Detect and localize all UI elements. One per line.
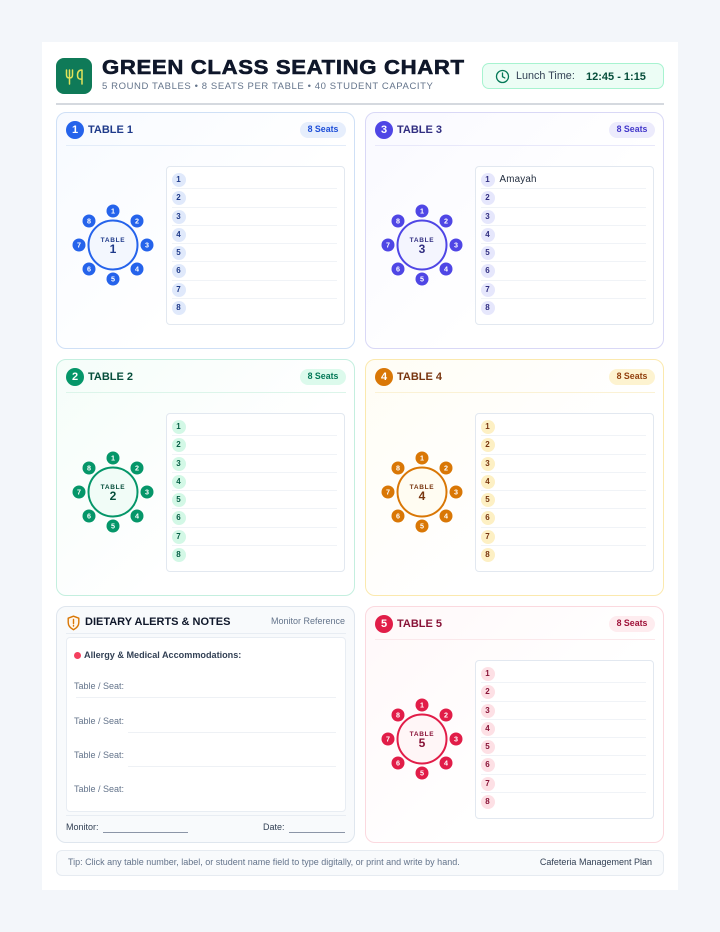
table 2 student list: 2 xyxy=(176,440,181,449)
table 4 heading: TABLE 4 xyxy=(397,371,442,383)
panel: table 5 xyxy=(365,606,664,843)
red alert dot xyxy=(74,652,81,659)
table 2 round diagram: 2 xyxy=(109,489,116,503)
table 3 round diagram: 3 xyxy=(418,242,425,256)
table 1 seat count xyxy=(300,122,346,138)
allergy heading xyxy=(74,650,241,660)
table 1 number badge: 1 xyxy=(72,124,78,136)
table 5 student list xyxy=(474,660,654,819)
table 4 seat count xyxy=(609,369,655,385)
table 1 round diagram: 1 xyxy=(109,242,116,256)
table 1 student list: 1 xyxy=(176,175,181,184)
table 5 student list: 4 xyxy=(485,724,490,733)
table 3 round diagram xyxy=(382,204,462,286)
table 5 round diagram: 1 xyxy=(420,700,424,710)
table 4 round diagram: 3 xyxy=(454,488,458,496)
table 5 heading: TABLE 5 xyxy=(397,618,442,630)
panel: table 4 xyxy=(365,359,664,596)
table 4 round diagram: 5 xyxy=(420,522,424,530)
icon: warning shield xyxy=(68,616,80,630)
table 1 round diagram: TABLE xyxy=(100,237,125,244)
table 5 student list: 3 xyxy=(485,706,490,715)
subtitle: 5 ROUND TABLES • 8 SEATS PER TABLE • 40 STUDENT CAPACITY xyxy=(102,81,434,92)
table 3 student list: 5 xyxy=(485,248,490,257)
table 2 student list: 3 xyxy=(176,459,181,468)
table 2 number badge: 2 xyxy=(72,371,78,383)
table 1 round diagram: 6 xyxy=(87,264,91,274)
table 1 student list: 4 xyxy=(176,230,181,239)
table 5 student list: 8 xyxy=(485,797,490,806)
table 5 round diagram: TABLE xyxy=(409,731,434,738)
table 2 round diagram: 4 xyxy=(135,512,139,520)
table seat field 3: Table / Seat: xyxy=(74,750,124,760)
table 2 seat count xyxy=(300,369,346,385)
table 2 round diagram: 8 xyxy=(87,464,91,472)
icon: clock xyxy=(496,70,510,84)
table 5 seat count: 8 Seats xyxy=(617,618,647,628)
table 3 number badge xyxy=(375,121,393,139)
table 4 round diagram: 4 xyxy=(444,512,448,520)
table 1 student list: 8 xyxy=(176,303,181,312)
panel: table 2 xyxy=(56,359,355,596)
table 2 round diagram: 2 xyxy=(135,464,139,472)
lunch time badge xyxy=(482,63,664,89)
table 3 student list: 1 xyxy=(485,175,490,184)
table 1 round diagram: 3 xyxy=(145,240,149,250)
table 1 round diagram: 8 xyxy=(87,216,91,226)
table 3 student list: 8 xyxy=(485,303,490,312)
footer tip: Tip: Click any table number, label, or student name field to type digitally, or print and write by hand. xyxy=(68,857,460,867)
table 3 round diagram: 3 xyxy=(454,240,458,250)
table 1 number badge xyxy=(66,121,84,139)
table seat field 2: Table / Seat: xyxy=(74,716,124,726)
table 4 round diagram: 8 xyxy=(396,464,400,472)
dietary heading: DIETARY ALERTS & NOTES xyxy=(85,616,230,628)
table 3 round diagram: 5 xyxy=(420,274,424,284)
table 2 round diagram xyxy=(72,452,154,532)
table 5 round diagram: 4 xyxy=(444,758,448,768)
table 1 student list: 7 xyxy=(176,285,181,294)
table 1 heading: TABLE 1 xyxy=(88,124,133,136)
table 2 student list: 7 xyxy=(176,532,181,541)
table 3 student list xyxy=(474,166,654,325)
table 5 seat count xyxy=(609,616,655,632)
table 2 seat count: 8 Seats xyxy=(308,371,338,381)
table 5 student list: 7 xyxy=(485,779,490,788)
panel: table 3 xyxy=(365,112,664,349)
table 3 seat count: 8 Seats xyxy=(617,124,647,134)
table 4 round diagram xyxy=(382,452,462,532)
table 2 round diagram: 5 xyxy=(111,522,115,530)
table 2 round diagram: 3 xyxy=(145,488,149,496)
table 3 round diagram: TABLE xyxy=(409,237,434,244)
table 4 seat count: 8 Seats xyxy=(617,371,647,381)
footer bar xyxy=(56,850,664,876)
table 1 student list: 2 xyxy=(176,193,181,202)
table 3 student list: 2 xyxy=(485,193,490,202)
table 1 round diagram: 2 xyxy=(135,216,139,226)
table 5 number badge xyxy=(375,615,393,633)
table 1 round diagram: 7 xyxy=(77,240,81,250)
table 2 round diagram: 7 xyxy=(77,488,81,496)
table 1 student list xyxy=(166,166,345,325)
table 2 student list: 8 xyxy=(176,550,181,559)
table 5 round diagram: 3 xyxy=(454,734,458,744)
table 4 round diagram: 6 xyxy=(396,512,400,520)
table 4 round diagram: 2 xyxy=(444,464,448,472)
table 5 round diagram: 8 xyxy=(396,710,400,720)
table 2 student list: 5 xyxy=(176,495,181,504)
table seat field 4: Table / Seat: xyxy=(74,784,124,794)
table 3 student list: 6 xyxy=(485,266,490,275)
table 4 number badge xyxy=(375,368,393,386)
table 2 student list: 6 xyxy=(176,513,181,522)
table 5 student list: 5 xyxy=(485,742,490,751)
table 2 number badge xyxy=(66,368,84,386)
table 3 student list: 3 xyxy=(485,212,490,221)
table 4 student list: 1 xyxy=(485,422,490,431)
table 3 round diagram: 8 xyxy=(396,216,400,226)
table 1 round diagram xyxy=(72,204,154,286)
footer plan name: Cafeteria Management Plan xyxy=(540,857,652,867)
allergy notes box xyxy=(66,637,346,812)
table 4 student list: 5 xyxy=(485,495,490,504)
table 4 number badge: 4 xyxy=(381,371,387,383)
table seat field 1: Table / Seat: xyxy=(74,681,124,691)
lunch time value: 12:45 - 1:15 xyxy=(586,70,646,82)
table 3 round diagram: 2 xyxy=(444,216,448,226)
table 4 student list: 6 xyxy=(485,513,490,522)
table 5 student list: 2 xyxy=(485,687,490,696)
table 3 student list: 4 xyxy=(485,230,490,239)
monitor reference label: Monitor Reference xyxy=(271,616,345,626)
panel: dietary alerts and notes xyxy=(56,606,355,843)
lunch label: Lunch Time: xyxy=(516,70,575,82)
date label: Date: xyxy=(263,822,285,832)
table 2 round diagram: 6 xyxy=(87,512,91,520)
table 3 seat count xyxy=(609,122,655,138)
table 2 student list xyxy=(166,413,345,572)
table 3 number badge: 3 xyxy=(381,124,387,136)
table 5 number badge: 5 xyxy=(381,618,387,630)
table 2 round diagram: 1 xyxy=(111,454,115,462)
table 5 round diagram: 7 xyxy=(386,734,390,744)
table 3 student list: 7 xyxy=(485,285,490,294)
table 5 round diagram: 6 xyxy=(396,758,400,768)
table 4 student list: 8 xyxy=(485,550,490,559)
monitor label: Monitor: xyxy=(66,822,99,832)
table 2 round diagram: TABLE xyxy=(100,484,125,491)
icon: fork and knife logo xyxy=(56,58,92,94)
table 3 student list: Amayah xyxy=(500,174,537,184)
table 4 student list: 3 xyxy=(485,459,490,468)
table 4 round diagram: 1 xyxy=(420,454,424,462)
allergy heading text: Allergy & Medical Accommodations: xyxy=(84,650,241,660)
table 4 student list: 2 xyxy=(485,440,490,449)
table 5 round diagram xyxy=(382,698,462,780)
table 5 student list: 6 xyxy=(485,760,490,769)
table 1 round diagram: 4 xyxy=(135,264,139,274)
table 3 round diagram: 1 xyxy=(420,206,424,216)
table 1 student list: 6 xyxy=(176,266,181,275)
panel: table 1 xyxy=(56,112,355,349)
table 2 student list: 1 xyxy=(176,422,181,431)
table 2 heading: TABLE 2 xyxy=(88,371,133,383)
table 4 round diagram: TABLE xyxy=(409,484,434,491)
table 1 round diagram: 5 xyxy=(111,274,115,284)
title: GREEN CLASS SEATING CHART xyxy=(102,56,465,78)
header rule xyxy=(56,103,664,105)
table 3 round diagram: 6 xyxy=(396,264,400,274)
table 2 student list: 4 xyxy=(176,477,181,486)
table 1 round diagram: 1 xyxy=(111,206,115,216)
table 5 round diagram: 2 xyxy=(444,710,448,720)
table 1 seat count: 8 Seats xyxy=(308,124,338,134)
table 3 heading: TABLE 3 xyxy=(397,124,442,136)
table 5 round diagram: 5 xyxy=(420,768,424,778)
table 4 round diagram: 4 xyxy=(418,489,425,503)
table 4 student list: 7 xyxy=(485,532,490,541)
table 4 student list xyxy=(474,413,654,572)
table 1 student list: 3 xyxy=(176,212,181,221)
table 3 round diagram: 4 xyxy=(444,264,448,274)
table 3 round diagram: 7 xyxy=(386,240,390,250)
table 5 student list: 1 xyxy=(485,669,490,678)
table 1 student list: 5 xyxy=(176,248,181,257)
table 5 round diagram: 5 xyxy=(418,736,425,750)
table 4 student list: 4 xyxy=(485,477,490,486)
table 4 round diagram: 7 xyxy=(386,488,390,496)
